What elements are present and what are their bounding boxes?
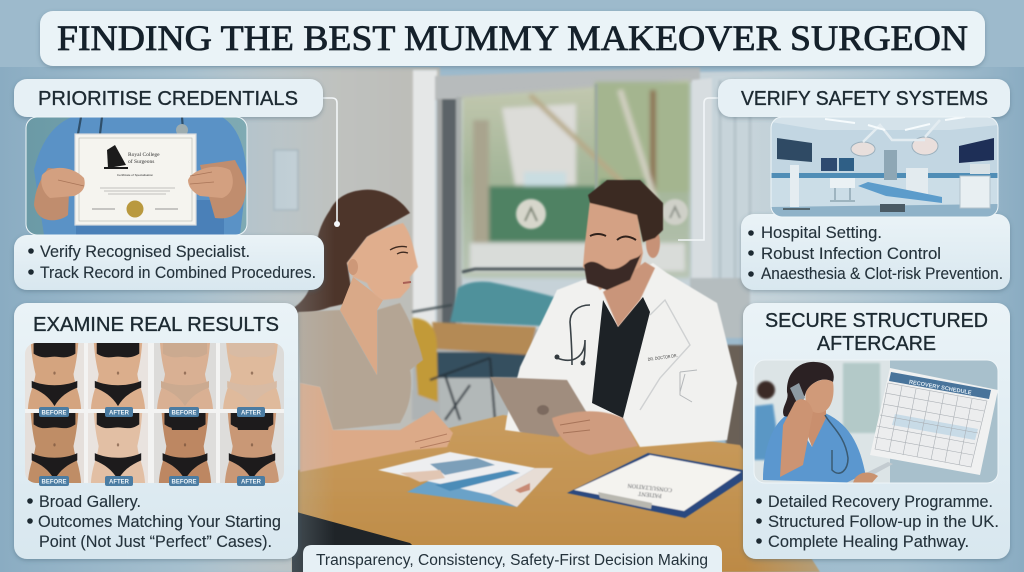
back table <box>432 322 536 355</box>
bullet list: Robust Infection Control <box>761 245 941 263</box>
photo labels: BEFORE <box>41 480 67 486</box>
doctor: tablet <box>490 377 590 437</box>
brochures on table <box>378 452 553 507</box>
foreground table <box>292 415 820 572</box>
before and after photo grid <box>25 343 284 483</box>
teal bench <box>450 282 558 326</box>
bullet list: Outcomes Matching Your Starting <box>38 513 281 531</box>
bullet list: Hospital Setting. <box>761 224 882 242</box>
background nurse <box>754 381 778 460</box>
photo: operating theatre <box>771 117 998 217</box>
bullet list: Track Record in Combined Procedures. <box>40 264 316 282</box>
photo labels: AFTER <box>241 410 262 416</box>
photo: surgeon holding certificate <box>26 117 247 235</box>
panel: prioritise credentials <box>14 79 324 290</box>
photo labels: AFTER <box>109 480 130 486</box>
footer banner: Transparency, Consistency, Safety-First Decision Making <box>316 552 708 569</box>
clipboard: CONSULTATION <box>627 482 672 492</box>
bullet list <box>756 493 999 551</box>
panel: examine real results <box>14 303 298 559</box>
heading: SECURE STRUCTURED <box>765 310 988 332</box>
bullet list: Verify Recognised Specialist. <box>40 243 250 261</box>
panel: verify safety systems <box>718 79 1010 290</box>
photo labels: AFTER <box>241 480 262 486</box>
photo labels: BEFORE <box>41 410 67 416</box>
heading: EXAMINE REAL RESULTS <box>33 314 279 336</box>
edge fades <box>0 0 335 572</box>
panel: secure structured aftercare <box>743 303 1010 559</box>
photo: surgeon holding certificate: Royal College <box>128 152 160 158</box>
clipboard: PATIENT <box>637 490 662 498</box>
surgical lights <box>851 142 875 156</box>
monitors <box>777 138 812 162</box>
calendar <box>870 368 998 475</box>
bullet list: Complete Healing Pathway. <box>768 533 969 551</box>
yellow chair <box>412 318 438 402</box>
doctor: head <box>583 180 663 327</box>
photo labels: AFTER <box>109 410 130 416</box>
footer banner <box>303 545 722 572</box>
photo labels <box>39 407 265 486</box>
bullet list: Anaesthesia & Clot-risk Prevention. <box>761 265 1003 283</box>
bullet list: Detailed Recovery Programme. <box>768 493 993 511</box>
doctor: name badge: DR. DOCTOR DR. <box>647 353 678 362</box>
photo: surgeon holding certificate: Certificate of Specialisation <box>117 173 153 177</box>
doctor: coat <box>505 263 737 447</box>
window logos <box>516 199 546 229</box>
equipment and bed <box>790 165 799 207</box>
doctor: hand <box>552 411 638 455</box>
connector: credentials to patient <box>322 98 340 227</box>
bullet list: Structured Follow-up in the UK. <box>768 513 999 531</box>
bullet list <box>27 493 281 551</box>
photo: surgeon holding certificate: of Surgeons <box>128 158 154 165</box>
bullet list <box>28 243 316 282</box>
heading: AFTERCARE <box>817 333 936 355</box>
woman: hair <box>288 190 410 314</box>
woman: shirt <box>298 303 423 430</box>
window view <box>462 80 690 278</box>
connector: safety systems to surgeon <box>678 98 719 240</box>
bullet list: Point (Not Just “Perfect” Cases). <box>39 533 272 551</box>
bullet list: Broad Gallery. <box>39 493 141 511</box>
photo labels: BEFORE <box>171 410 197 416</box>
nurse <box>763 413 867 483</box>
woman: neck and face <box>340 277 383 375</box>
title banner <box>40 11 985 66</box>
heading <box>765 310 988 355</box>
photo: nurse and recovery schedule: RECOVERY SCHEDULE <box>908 380 972 397</box>
woman: arm and hands <box>300 383 453 472</box>
photo: nurse and recovery schedule <box>754 360 998 485</box>
heading: VERIFY SAFETY SYSTEMS <box>741 88 988 110</box>
bullet list <box>748 224 1003 283</box>
doctor: scrubs <box>592 297 650 418</box>
heading: PRIORITISE CREDENTIALS <box>38 88 298 110</box>
photo labels: BEFORE <box>171 480 197 486</box>
title banner: FINDING THE BEST MUMMY MAKEOVER SURGEON <box>57 18 968 58</box>
doctor: stethoscope <box>557 305 590 365</box>
clipboard <box>567 453 743 518</box>
